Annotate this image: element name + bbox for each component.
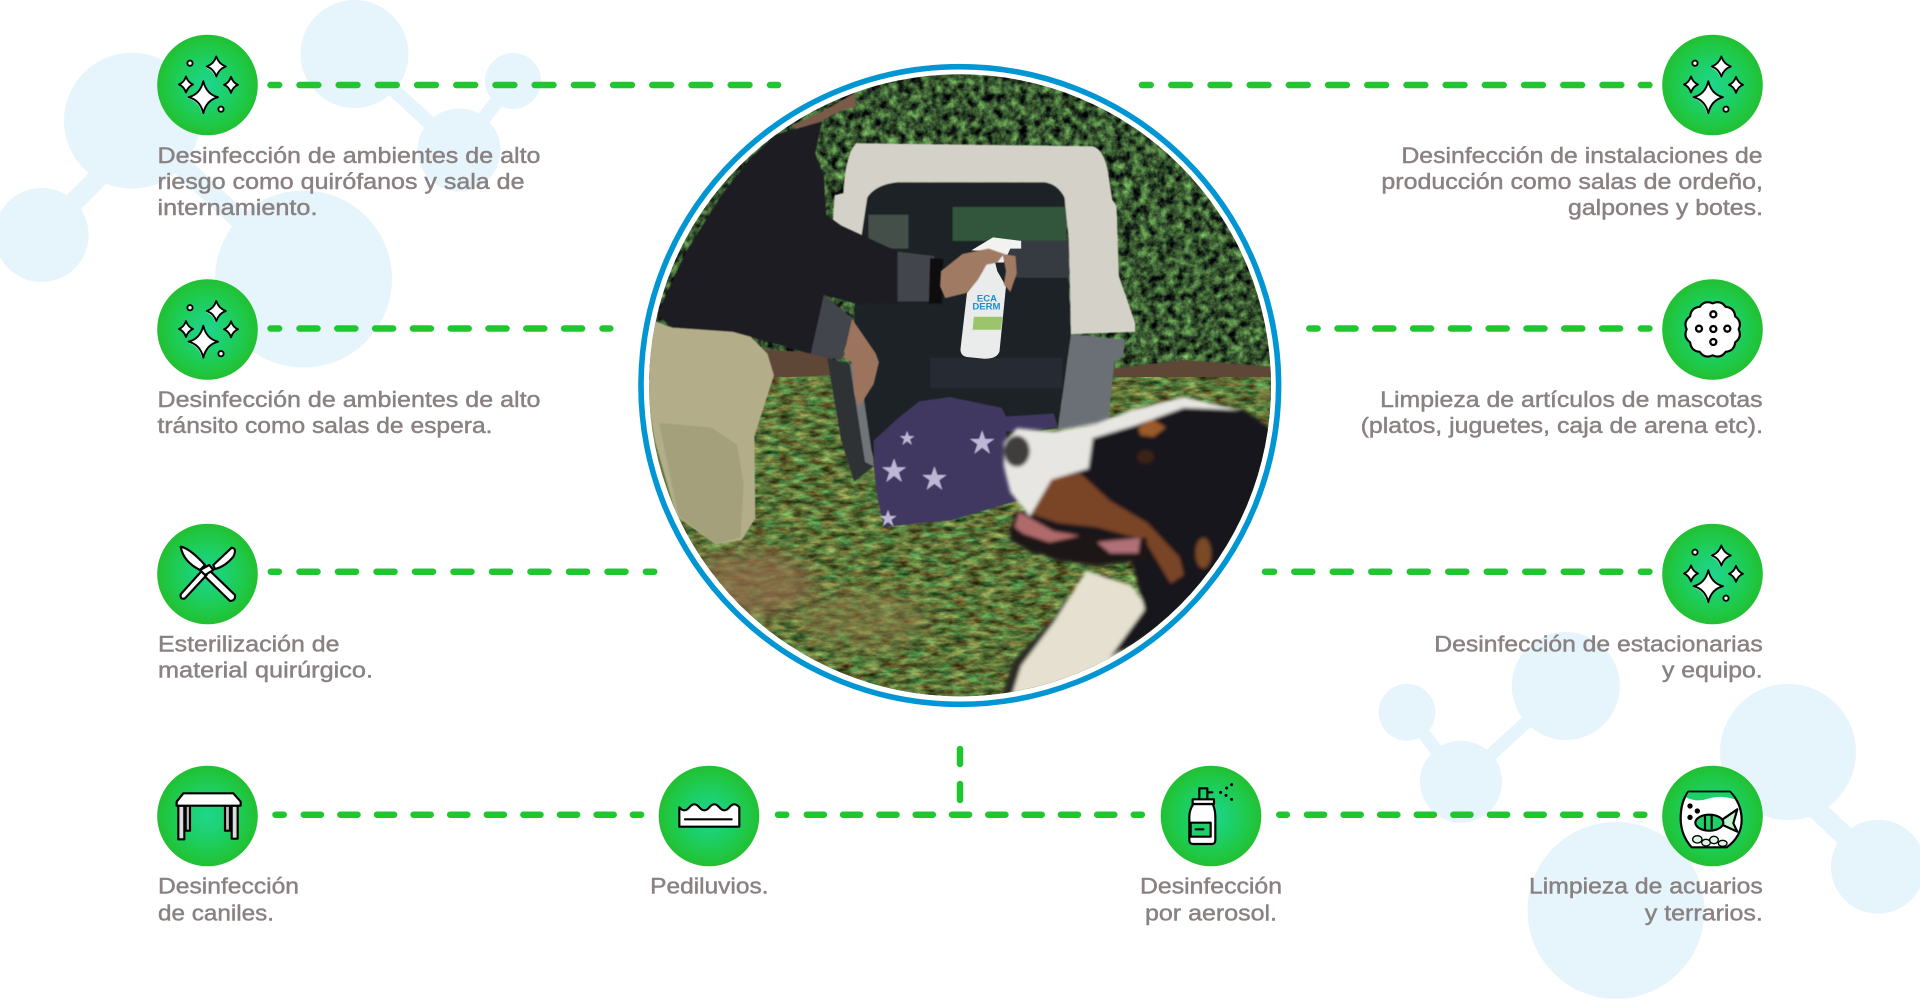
connector	[276, 811, 641, 818]
text	[1434, 632, 1763, 682]
text	[1361, 387, 1763, 438]
text: Desinfección de ambientes de alto	[158, 143, 540, 168]
connector	[270, 325, 610, 332]
icon: table	[157, 766, 258, 866]
connector	[1142, 82, 1649, 88]
item: instalaciones de producción	[1142, 35, 1763, 220]
text: Desinfección de estacionarias	[1434, 632, 1763, 656]
text	[158, 632, 373, 682]
text	[158, 143, 540, 220]
grass	[637, 375, 1275, 711]
item: aerosol	[1140, 766, 1282, 926]
text	[158, 873, 299, 926]
background molecule: top left	[0, 0, 541, 368]
item: caniles	[157, 766, 641, 926]
spray bottle: DERM	[972, 301, 1001, 312]
text: riesgo como quirófanos y sala de	[158, 169, 524, 194]
text	[1140, 873, 1282, 926]
man	[649, 93, 943, 544]
text	[158, 387, 540, 438]
connector: vertical to photo	[957, 749, 963, 800]
text: Pediluvios.	[650, 873, 768, 898]
text: internamiento.	[158, 195, 318, 220]
icon: footbath	[659, 766, 759, 866]
text: y equipo.	[1662, 658, 1763, 682]
text: Limpieza de artículos de mascotas	[1380, 387, 1763, 412]
text: galpones y botes.	[1568, 195, 1763, 220]
connector	[270, 82, 778, 88]
background molecule: bottom right	[1379, 632, 1920, 999]
icon: scalpels	[157, 524, 258, 624]
item: pediluvios	[650, 766, 768, 898]
item: estacionarias y equipo	[1265, 524, 1763, 682]
text: producción como salas de ordeño,	[1381, 169, 1763, 194]
icon: germ	[1662, 279, 1763, 380]
text: tránsito como salas de espera.	[158, 413, 492, 438]
spray bottle	[960, 237, 1021, 359]
item: alto riesgo	[157, 35, 778, 220]
item: artículos de mascotas	[1309, 279, 1763, 438]
text: Limpieza de acuarios	[1529, 873, 1763, 898]
icon: fish bowl	[1662, 766, 1763, 866]
item: acuarios	[1529, 766, 1763, 926]
item: material quirúrgico	[157, 524, 654, 682]
connector	[1309, 325, 1649, 332]
cushion with stars	[874, 397, 1058, 527]
text: Desinfección de instalaciones de	[1401, 143, 1763, 168]
connector: horizontal middle	[778, 811, 1142, 818]
central photo: man spraying a pet crate with a dog	[637, 67, 1288, 711]
text: de caniles.	[158, 900, 274, 926]
text: Desinfección	[1140, 873, 1282, 898]
connector	[1265, 568, 1649, 575]
text: (platos, juguetes, caja de arena etc).	[1361, 413, 1763, 438]
dog	[1002, 397, 1275, 701]
spray bottle: ECA	[977, 294, 997, 305]
item: alto tránsito	[157, 279, 610, 438]
icon: sparkles	[1662, 35, 1763, 135]
icon: sparkles	[1662, 524, 1763, 624]
text: y terrarios.	[1645, 900, 1763, 926]
text: Desinfección de ambientes de alto	[158, 387, 540, 412]
text	[1529, 873, 1763, 926]
icon: spray bottle	[1161, 766, 1261, 866]
text: Desinfección	[158, 873, 299, 898]
text	[1381, 143, 1763, 220]
hedge	[637, 67, 1288, 380]
text: material quirúrgico.	[158, 658, 373, 682]
soil	[763, 349, 1275, 423]
icon: sparkles	[157, 35, 258, 135]
connector: bottom right	[1279, 811, 1644, 818]
icon: sparkles	[157, 279, 258, 380]
text: Esterilización de	[158, 632, 340, 656]
blue ring around photo	[641, 67, 1279, 704]
hand on bottle	[940, 249, 1017, 298]
connector	[271, 568, 654, 575]
text: por aerosol.	[1145, 900, 1277, 926]
pet crate	[827, 143, 1135, 482]
